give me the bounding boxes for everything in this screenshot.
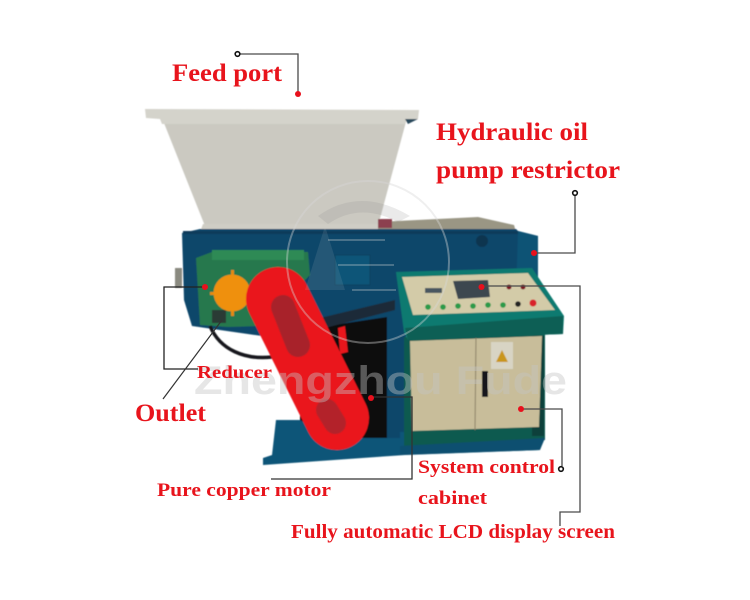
leader: reducer [164,284,208,369]
red belt cover [278,299,348,423]
machine base [263,420,540,465]
label: outlet: Outlet [135,400,207,427]
label: system control cabinet: cabinet [418,488,488,509]
black hose [210,326,272,358]
label: fully automatic LCD display screen: Fully automatic LCD display screen [291,521,615,543]
watermark text: Zhengzhou Fude [194,359,567,403]
orange reducer cap [210,270,256,316]
black motor section [300,317,387,440]
leader: pure copper motor [271,395,412,479]
label: reducer: Reducer [197,362,272,382]
machine top plate [378,217,516,232]
leader: fully automatic LCD display screen [478,284,580,526]
leader: outlet [163,320,222,399]
control cabinet [400,331,545,455]
label: hydraulic oil pump restrictor [436,119,620,184]
watermark logo [287,181,449,343]
label: feed port: Feed port [172,60,283,87]
label: hydraulic oil pump restrictor: pump restrictor [436,157,620,184]
leader: hydraulic oil pump restrictor [531,191,577,256]
shredder machine [145,109,564,465]
label: pure copper motor: Pure copper motor [157,481,331,501]
leader: feed port [235,52,301,97]
blue machine body [175,229,538,440]
feed hopper [145,109,419,232]
label: system control cabinet: System control [418,457,555,478]
leader: system control cabinet [518,406,563,471]
green reducer housing [196,250,310,327]
label: system control cabinet [418,457,555,509]
panel buttons [425,284,536,310]
control panel [396,268,564,340]
LCD display screen [453,280,490,299]
label: hydraulic oil pump restrictor: Hydraulic oil [436,119,588,146]
